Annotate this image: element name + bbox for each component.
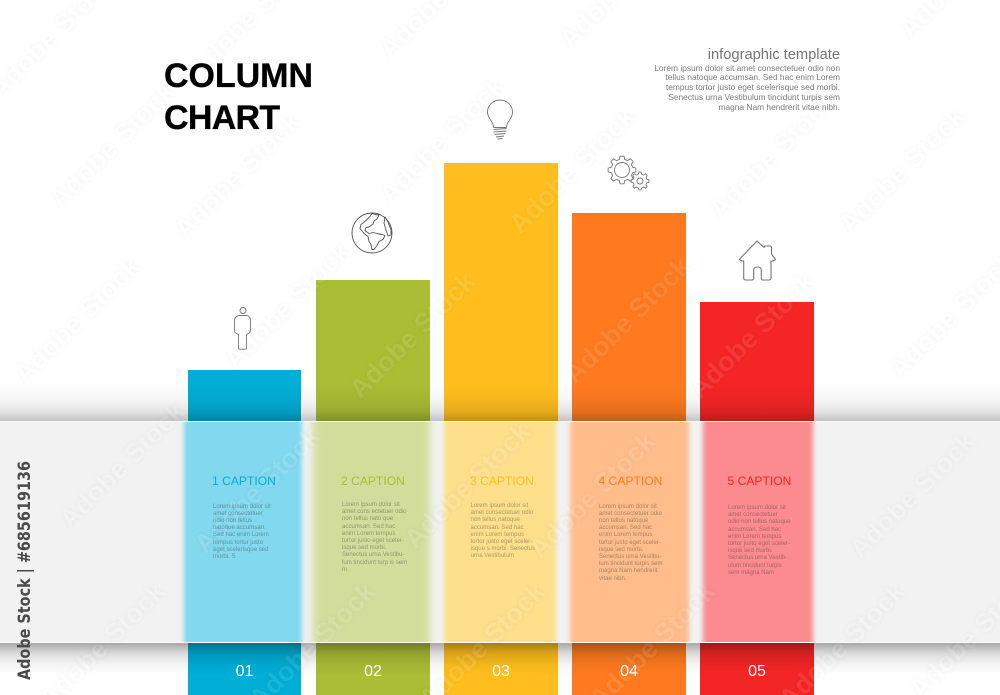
caption 4 text: Senectus urna Vestibu- — [599, 554, 662, 560]
number 02: 02 — [364, 663, 382, 680]
caption 4 text: amet consectetuer odio — [599, 511, 662, 517]
frosted column yellow — [444, 402, 556, 662]
caption 3 text: urna Vestibulum — [470, 553, 514, 559]
caption 4 text — [599, 504, 663, 582]
caption 2 text: m — [342, 567, 347, 573]
caption 2 heading: 2 CAPTION — [341, 474, 405, 488]
caption 3 text: amet consectetuer odio — [470, 510, 533, 516]
caption 1 heading: 1 CAPTION — [212, 474, 276, 488]
caption 4 text: magna Nam hendrerit — [599, 568, 657, 574]
caption 3 text: Lorem ipsum dolor sit — [470, 503, 528, 509]
horizontal caption band — [0, 421, 1000, 643]
caption 2 text: accumsan. Sed hac — [342, 524, 395, 530]
caption 5 text: tortor justo eget sceler- — [728, 541, 790, 547]
watermark pattern: Adobe Stock — [343, 266, 481, 404]
caption 4 text: accumsan. Sed hac — [599, 525, 652, 531]
watermark pattern: Adobe Stock — [503, 101, 641, 239]
number 01: 01 — [236, 663, 253, 680]
caption 4 text: tortor justo eget sceler- — [599, 540, 661, 546]
subtitle text: Lorem ipsum dolor sit amet consectetuer odio non — [654, 62, 840, 72]
subtitle block — [654, 47, 840, 112]
caption 4 text: enim Lorem tempus — [599, 532, 652, 538]
frosted column red — [703, 402, 813, 662]
watermark pattern: Adobe Stock — [683, 266, 821, 404]
number 05: 05 — [748, 663, 766, 680]
caption 1 text — [213, 504, 271, 560]
caption 1 text: natoque accumsan. — [213, 525, 266, 531]
caption 1 text: Lorem ipsum dolor sit — [213, 504, 271, 510]
caption 2 text: non tellus nato que — [342, 516, 393, 522]
watermark pattern: Adobe Stock — [843, 426, 981, 564]
caption block 5 — [728, 474, 791, 576]
number 03: 03 — [492, 663, 510, 680]
frosted column green — [313, 402, 430, 662]
watermark pattern: Adobe Stock — [523, 426, 661, 564]
caption 2 text: enim Lorem tempus — [342, 531, 395, 537]
caption 2 text: Lorem ipsum dolor sit — [342, 502, 400, 508]
title — [164, 57, 313, 137]
caption 5 text: enim Lorem tempus — [728, 534, 781, 540]
watermark pattern: Adobe Stock — [168, 106, 306, 244]
caption 1 text: tempus tortor justo — [213, 540, 263, 546]
caption 1 text: eget scelerisque sed — [213, 547, 268, 553]
caption 1 text: amet consectetuer — [213, 511, 263, 517]
subtitle text: Senectus urna Vestibulum tincidunt turpis sem — [668, 92, 840, 102]
caption 2 text: amet cons ectetuer odio — [342, 509, 407, 515]
caption 4 text: non tellus natoque — [599, 518, 648, 524]
caption block 3 — [470, 474, 535, 559]
caption 3 text: enim Lorem tempus — [470, 532, 524, 538]
column 1 blue — [188, 370, 301, 695]
column 3 yellow — [444, 163, 558, 695]
watermark pattern: Adobe Stock — [558, 251, 696, 389]
caption 2 text: lum tincidunt turp is sem — [342, 560, 407, 566]
watermark pattern: Adobe Stock — [218, 236, 356, 374]
title: COLUMN — [164, 57, 313, 95]
caption 4 text: isque sed morbi. — [599, 547, 643, 553]
watermark pattern: Adobe Stock — [8, 251, 146, 389]
icon: house — [738, 240, 776, 280]
icon: globe — [352, 212, 392, 254]
icon: person — [234, 307, 251, 350]
icon: light bulb — [487, 100, 513, 140]
frosted column blue — [184, 402, 302, 662]
caption 2 text: tortor justo eget sceler- — [342, 538, 404, 544]
shadow above band — [0, 383, 1000, 421]
watermark pattern: Adobe Stock — [373, 71, 511, 209]
caption 1 text: morbi. S — [213, 554, 236, 560]
shadow below band — [0, 643, 1000, 675]
caption 3 text: accumsan. Sed hac — [470, 525, 524, 531]
caption block 2 — [341, 474, 407, 573]
title: CHART — [164, 99, 279, 137]
number 04: 04 — [620, 663, 638, 680]
watermark pattern: Adobe Stock — [188, 421, 326, 559]
subtitle text: tempus tortor justo eget scelerisque sed morbi. — [666, 82, 840, 92]
subtitle text: tellus natoque accumsan. Sed hac enim Lorem — [665, 72, 840, 82]
subtitle text — [654, 62, 840, 112]
icon: gears — [608, 156, 650, 190]
watermark pattern: Adobe Stock — [398, 416, 536, 554]
caption 5 text: amet consectetuer — [728, 512, 778, 518]
watermark pattern: Adobe Stock — [703, 86, 841, 224]
column 2 green — [316, 280, 430, 695]
caption 5 text: ulum tincidunt turpis — [728, 563, 782, 569]
caption block 4 — [598, 474, 663, 582]
caption 3 text: tortor justo eget sceler- — [470, 539, 532, 545]
column 4 orange — [572, 213, 686, 695]
caption 4 heading: 4 CAPTION — [598, 474, 662, 488]
column numbers — [236, 663, 766, 680]
caption 5 text: isque sed morbi. — [728, 548, 772, 554]
caption 2 text: isque sed morbi. — [342, 545, 386, 551]
caption 3 text — [470, 502, 535, 559]
caption 5 text: Lorem ipsum dolor sit — [728, 505, 786, 511]
caption 1 text: odio non tellus — [213, 518, 252, 524]
caption 5 heading: 5 CAPTION — [728, 474, 791, 488]
caption 3 text: isque s morbi. Senectus — [470, 546, 535, 552]
caption 2 text — [342, 502, 407, 573]
subtitle text: magna Nam hendrerit vitae nibh. — [718, 102, 840, 112]
caption 5 text: Senectus urna Vestib- — [728, 555, 787, 561]
caption 2 text: Senectus urna Vestibu- — [342, 552, 405, 558]
caption 4 text: Lorem ipsum dolor sit — [599, 504, 657, 510]
caption 1 text: Sed hac enim Lorem — [213, 532, 269, 538]
caption 5 text: sem magna Nam — [728, 570, 774, 576]
column 5 red — [700, 302, 814, 695]
watermark pattern: Adobe Stock — [53, 396, 191, 534]
caption 4 text: vitae nibh. — [599, 576, 627, 582]
caption 5 text — [728, 504, 791, 576]
caption 5 text: odio non tellus natoque — [728, 519, 791, 525]
watermark pattern: Adobe Stock — [43, 76, 181, 214]
caption 4 text: lum tincidunt turpis sem — [599, 561, 663, 567]
caption 3 text: non tellus natoque — [470, 517, 520, 523]
subtitle heading: infographic template — [708, 47, 840, 63]
frosted column orange — [570, 402, 689, 662]
watermark pattern: Adobe Stock — [833, 101, 971, 239]
caption 3 heading: 3 CAPTION — [470, 474, 534, 488]
caption 5 text: accumsan. Sed hac — [728, 527, 781, 533]
caption block 1 — [212, 474, 276, 560]
